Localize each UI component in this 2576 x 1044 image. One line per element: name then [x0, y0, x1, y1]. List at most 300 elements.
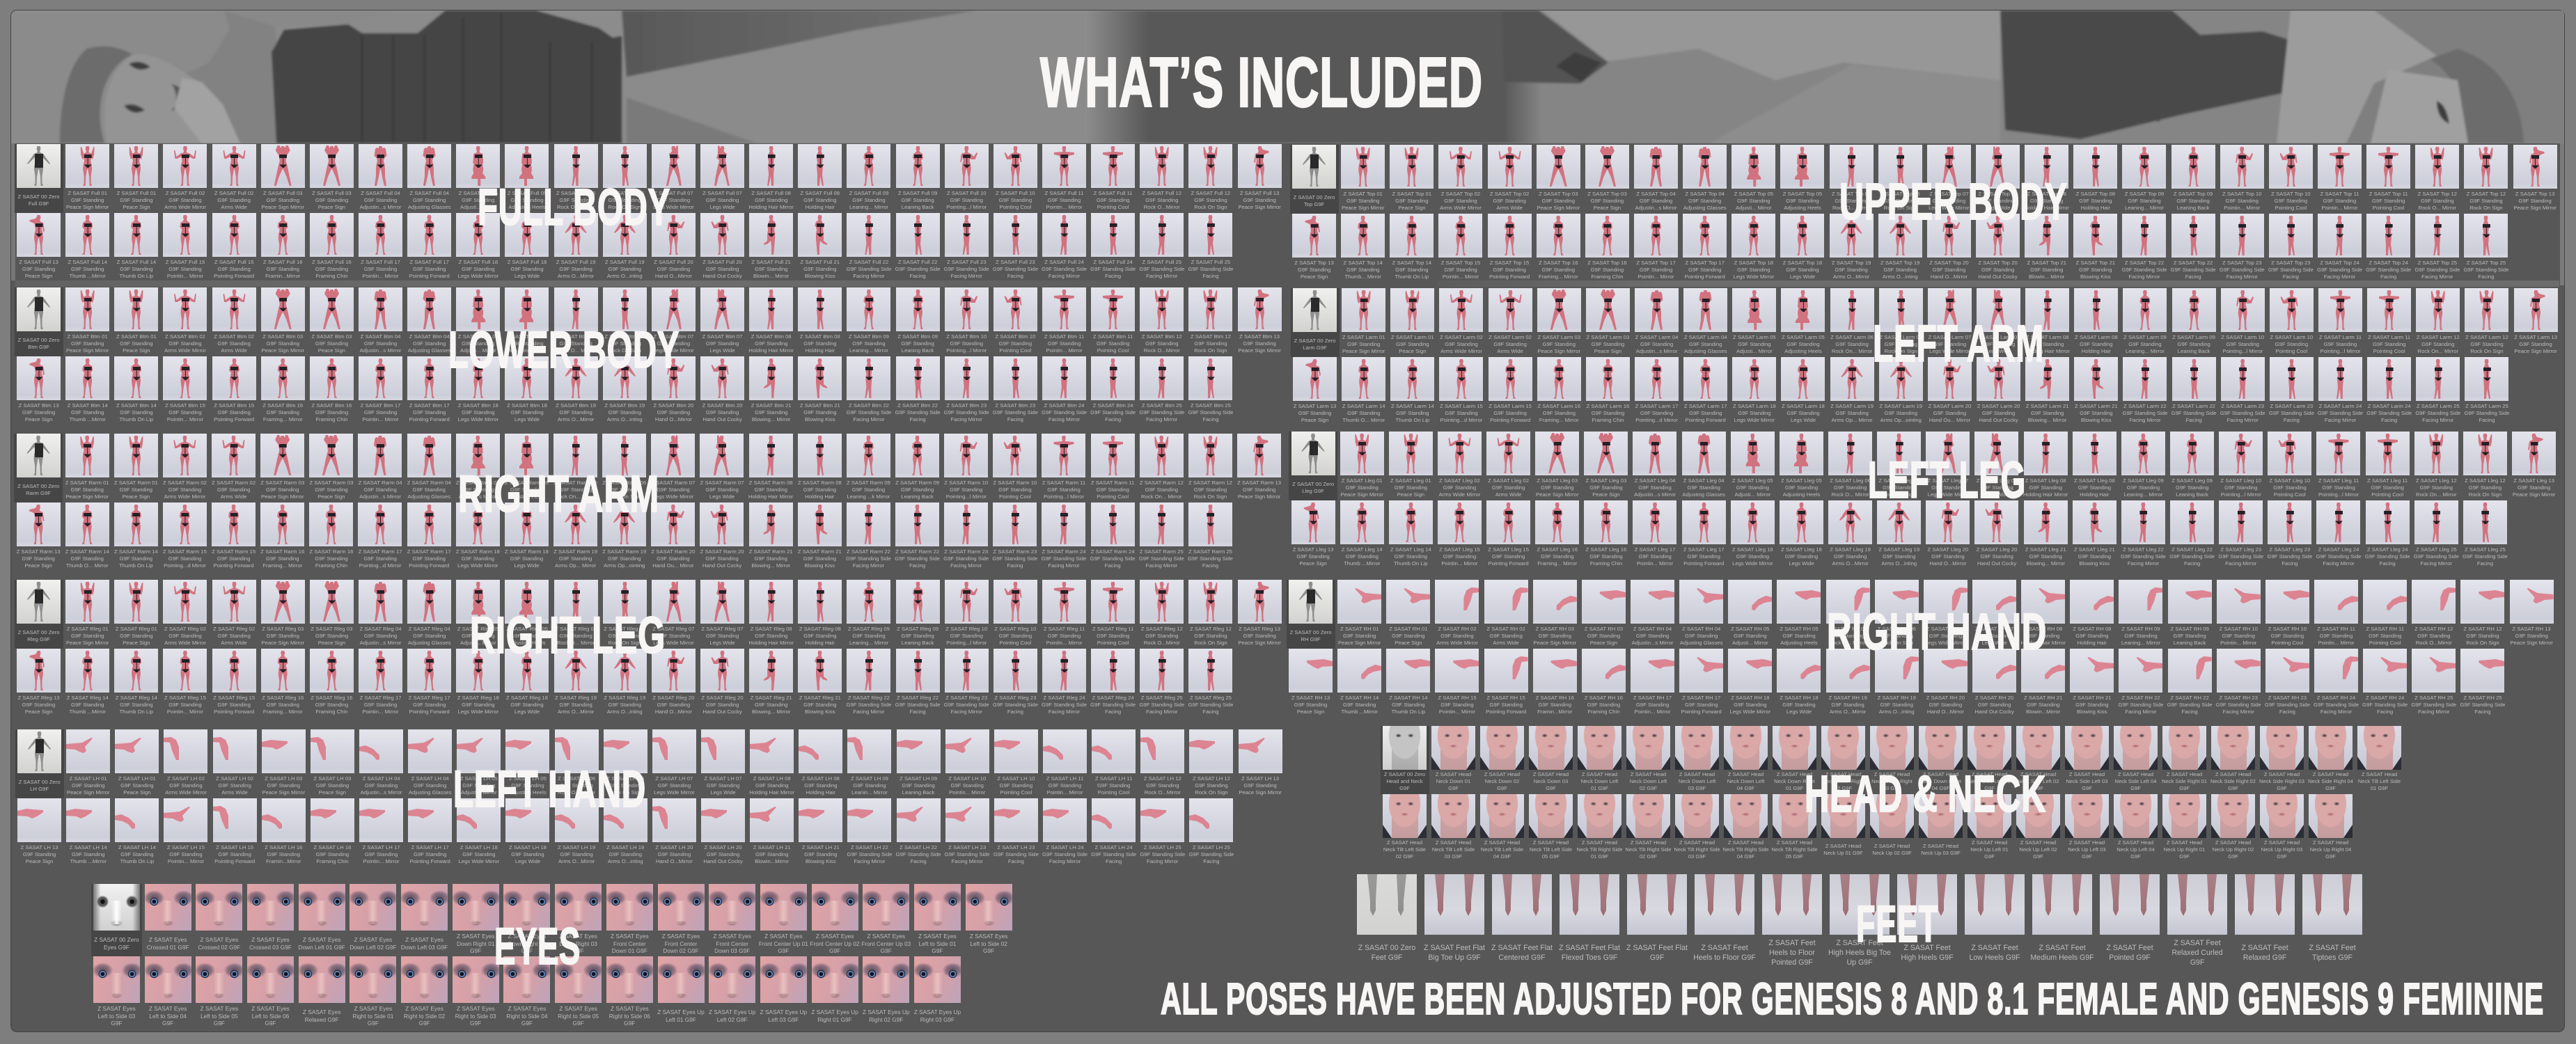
row 1: Adjustin...s Mirror	[1632, 640, 1673, 646]
row 2: Z SASAT Top 17	[1685, 259, 1725, 266]
row 2: G9F Standing	[1396, 410, 1429, 416]
row 1: G9F Standing	[1145, 340, 1179, 347]
row 2: G9F Standing	[217, 409, 251, 416]
row 1: Rock On... Mirror	[555, 493, 596, 500]
row 2: G9F Standing	[72, 851, 104, 857]
row 1: Down Right 01	[457, 940, 494, 947]
row 1: G9F Standing	[1443, 484, 1476, 491]
row 2: Peace Sign	[1301, 417, 1328, 423]
row 1: Rock O...Mirror	[1145, 789, 1181, 796]
row 2: Z SASAT LH 18	[509, 844, 547, 851]
row 2: Facing Mirror	[2128, 274, 2160, 280]
row 1: Rock On Sign	[1194, 640, 1227, 646]
row 2: Z SASAT Full 25	[1191, 259, 1230, 264]
row 1: Z SASAT Lleg 04	[1683, 477, 1725, 483]
row 2: Facing Mirror	[1049, 858, 1081, 864]
row 1: Z SASAT Feet	[2309, 944, 2356, 952]
row 1: Z SASAT RH 01	[1340, 625, 1379, 632]
row 2: Thumb ...Mirror	[69, 416, 106, 422]
background band right column	[1438, 280, 2559, 287]
row 1: Z SASAT Rleg 12	[1141, 625, 1183, 632]
row 1: G9F Standing	[218, 782, 251, 789]
row 1: G9F Standing	[804, 782, 838, 789]
row 2: Legs Wide Mirror	[457, 562, 498, 569]
row 1: Z SASAT 00 Zero	[94, 936, 139, 943]
row 1: Big Toe Up G9F	[1428, 954, 1481, 962]
row 2: Facing Mirror	[1049, 709, 1080, 715]
row 1: Crossed 02 G9F	[198, 944, 240, 951]
row 2: G9F Standing	[168, 266, 202, 272]
row 1: Z SASAT Lleg 02	[1439, 477, 1480, 483]
row 2: Z SASAT Rarm 17	[407, 548, 451, 554]
row 2: Z SASAT Head	[1484, 839, 1520, 846]
row 1: G9F Standing	[1048, 340, 1081, 347]
row 1: Peace Sign Mirror	[1238, 493, 1280, 500]
row 2: Z SASAT Rarm 23	[993, 548, 1037, 554]
row 1: G9F Standing	[267, 633, 299, 639]
row 1: Z SASAT Larm 12	[2465, 334, 2508, 340]
row 1: Pointin... Mirror	[1046, 204, 1083, 210]
row 2: Facing	[1106, 858, 1122, 864]
row 2: Legs Wide Mirror	[458, 273, 498, 279]
row 1: Front Center Up 03	[861, 940, 911, 947]
row 2: Pointing Forward	[409, 273, 450, 279]
row 1: Z SASAT Feet	[2106, 944, 2153, 952]
row 1: Arms Wide	[1497, 348, 1523, 354]
row 1: Down 01 G9F	[612, 947, 647, 954]
row 1: Rock O...Mirror	[1144, 347, 1180, 354]
row 2: G9F Standing	[754, 555, 787, 562]
row 2: Facing	[910, 273, 926, 279]
heading: eyes: EYES	[494, 917, 581, 975]
row 1: G9F Standing	[2176, 198, 2210, 204]
row 2: G9F Standing	[559, 409, 592, 416]
row 1: Holding Hair	[2082, 348, 2111, 354]
row 1: Peace Sign	[318, 204, 345, 210]
row 1: Z SASAT Eyes	[354, 936, 392, 943]
row 2: G9F Standing	[657, 555, 690, 562]
row 1: G9F Standing	[1097, 197, 1129, 203]
row 1: Arms Wide Mirror	[164, 640, 206, 646]
row 2: G9F Standing	[1835, 267, 1868, 273]
row 2: Z SASAT Rarm 18	[456, 548, 500, 554]
row 2: Left 03 G9F	[768, 1016, 799, 1023]
row 2: G9F Standing	[23, 851, 56, 857]
row 1: G9F Standing	[657, 197, 690, 203]
row 1: Z SASAT Full 03	[312, 189, 352, 196]
row 1: Holding Hair	[806, 789, 835, 796]
row 1: Z SASAT Rarm 11	[1042, 479, 1085, 486]
row 2: Arms Op... Mirror	[555, 562, 596, 569]
row 1: G9F Standing	[2518, 484, 2550, 491]
row 2: Z SASAT Btm 20	[702, 402, 742, 408]
row 2: G9F Standing Side	[2122, 410, 2167, 416]
row 1: 01 G9F	[1591, 785, 1608, 791]
row 2: Pointing Forward	[409, 709, 450, 715]
row 2: Z SASAT RH 25	[2463, 695, 2502, 700]
row 2: Z SASAT Top 23	[2271, 259, 2311, 266]
row 2: G9F Standing Side	[1139, 702, 1184, 708]
row 2: Z SASAT Rleg 20	[652, 695, 694, 700]
row 2: Peace Sign	[25, 709, 52, 715]
row 2: G9F Standing	[1782, 702, 1816, 708]
row 1: Adjusti... Mirror	[1736, 348, 1773, 354]
row 2: G9F Standing	[2075, 702, 2109, 708]
row 1: G9F	[2179, 785, 2190, 791]
row 1: Z SASAT Btm 08	[800, 333, 840, 340]
row 1: Adjustin...s Mirror	[360, 204, 401, 210]
row 1: G9F Standing	[1395, 198, 1429, 204]
row 1: G9F Standing	[1884, 198, 1917, 204]
row 1: Rarm G9F	[26, 490, 51, 496]
row 1: Z SASAT Top 03	[1587, 191, 1627, 196]
row 2: Z SASAT Lleg 14	[1390, 546, 1431, 553]
row 1: Peace Sign	[1397, 491, 1424, 498]
row 1: Z SASAT Larm 01	[1342, 334, 1385, 340]
row 2: G9F Standing	[217, 555, 250, 562]
background bands between screenshot blocks	[15, 280, 1129, 287]
row 1: Adjusting Heels	[509, 789, 547, 796]
row 1: Z SASAT Feet	[1903, 944, 1951, 952]
row 2: Pointin... Mirror	[1439, 709, 1475, 715]
row 1: Rock On Sign	[1195, 789, 1228, 796]
row 1: G9F Standing	[2470, 341, 2504, 347]
row 1: Neck Side Right 01	[2162, 778, 2207, 784]
row 2: G9F Standing	[2030, 267, 2063, 273]
row 2: G9F Standing	[1883, 553, 1915, 560]
row 1: Rock On Sign	[2469, 491, 2502, 498]
row 2: Z SASAT Btm 25	[1191, 402, 1231, 408]
row 1: G9F Standing	[1243, 340, 1276, 347]
row 1: Pointing...l Mirror	[2222, 348, 2263, 354]
row 2: G9F Standing	[71, 409, 104, 416]
row 2: Neck Tilt Left Side	[1530, 846, 1572, 853]
row 2: G9F Standing	[803, 702, 837, 708]
row 2: Peace Sign	[25, 416, 52, 422]
row 2: Blowing Kiss	[2081, 417, 2112, 423]
row 2: Z SASAT Head	[2020, 839, 2056, 846]
row 1: Holding Hair	[806, 640, 835, 646]
row 2: Pointing...d Mirror	[359, 562, 401, 569]
row 1: Z SASAT Larm 09	[2172, 334, 2215, 340]
row 2: Blowin... Mirror	[753, 273, 789, 279]
row 1: 04 G9F	[1737, 785, 1754, 791]
row 2: Z SASAT LH 22	[851, 844, 888, 851]
row 1: 02 G9F	[1640, 785, 1657, 791]
row 2: Neck Up Right 03	[2261, 846, 2302, 853]
row 1: G9F Standing	[608, 633, 641, 639]
row 1: Legs Wide Mirror	[653, 640, 694, 646]
row 1: Pointing Cool	[1097, 493, 1129, 500]
row 1: G9F Standing	[1194, 633, 1227, 639]
row 2: Z SASAT Rarm 16	[260, 548, 304, 554]
row 2: Z SASAT Top 16	[1587, 259, 1627, 266]
row 1: Peace Sign Mirror	[2514, 348, 2557, 354]
row 1: G9F Standing	[608, 487, 641, 493]
row 2: G9F Standing	[1638, 553, 1672, 560]
row 2: Z SASAT Head	[1825, 843, 1861, 849]
row 2: Z SASAT LH 21	[802, 844, 840, 851]
row 1: Pointing Cool	[2274, 491, 2306, 498]
row 2: Z SASAT Top 21	[2027, 259, 2066, 266]
row 2: Z SASAT LH 23	[997, 844, 1035, 851]
row 2: G9F Standing	[1347, 410, 1380, 416]
row 1: Z SASAT Head	[1972, 771, 2007, 777]
row 2: Facing Mirror	[2324, 274, 2355, 280]
row 1: G9F Standing	[217, 197, 251, 203]
row 1	[1291, 288, 2558, 357]
row 2: G9F	[214, 1020, 225, 1027]
row 2: Z SASAT LH 25	[1193, 844, 1230, 851]
row 1: Z SASAT Rleg 10	[994, 625, 1036, 632]
row 1: G9F Standing	[168, 197, 202, 203]
row 1: Z SASAT Rleg 07	[702, 625, 744, 632]
row 2: G9F Standing Side	[846, 702, 891, 708]
row 2: Facing Mirror	[853, 416, 885, 422]
row 2: Z SASAT RH 19	[1878, 695, 1916, 700]
row 1: Rock O... Mirror	[557, 204, 595, 210]
row 1: Arms Wide Mirror	[164, 347, 206, 354]
row 2: Z SASAT Rarm 15	[212, 548, 256, 554]
row 1: G9F Standing	[1395, 484, 1427, 491]
row 2: Framing Chin	[1592, 417, 1624, 423]
row 2: Framin...Mirror	[265, 273, 300, 279]
row 1: Z SASAT Full 06	[556, 189, 595, 196]
row 1: G9F	[778, 947, 789, 954]
row 1: Neck Down Right	[1920, 778, 1961, 784]
row 1: Rock On Sign	[608, 493, 641, 500]
row 2: G9F Standing	[1736, 553, 1769, 560]
row 2: Facing	[2380, 274, 2396, 280]
row 2: Z SASAT Top 18	[1734, 259, 1773, 266]
row 1: G9F Standing	[658, 782, 691, 789]
row 1: Centered G9F	[1498, 954, 1546, 962]
row 1: Peace Sign Mirror	[2513, 491, 2555, 498]
row 2: G9F Standing	[1688, 267, 1721, 273]
row 2: Left 02 G9F	[717, 1016, 748, 1023]
row 1: Crossed 03 G9F	[249, 944, 292, 951]
row 2: G9F Standing Side	[2121, 553, 2166, 560]
row 2: Thumb ...Mirror	[69, 709, 106, 715]
row 1: Z SASAT Rleg 02	[164, 625, 206, 632]
row 2: Z SASAT Lleg 24	[2318, 546, 2359, 553]
row 1: Z SASAT 00 Zero	[1294, 337, 1336, 344]
row 2: Hand Out Cocky	[1974, 709, 2014, 715]
row 2: Z SASAT Btm 25	[1142, 402, 1182, 408]
row 1: Peace Sign Mirror	[1537, 205, 1580, 211]
row 2: Z SASAT Full 24	[1093, 259, 1133, 264]
row 1: G9F Standing	[267, 782, 300, 789]
row 2: G9F Standing	[1492, 553, 1525, 560]
row 2: G9F Standing Side	[2316, 553, 2362, 560]
row 1: Z SASAT RH 07	[1975, 625, 2013, 632]
row 2: Z SASAT LH 23	[948, 844, 986, 851]
row 2: Arms O...inting	[1883, 274, 1918, 280]
row 2: Framing Chin	[315, 709, 347, 715]
row 1: Z SASAT Eyes	[559, 933, 597, 940]
row 2: Z SASAT Top 15	[1490, 259, 1529, 266]
row 2: G9F Standing Side	[2220, 267, 2265, 273]
row 1: Peace Sign Mirror	[1342, 348, 1385, 354]
row 1: Z SASAT Head	[2020, 771, 2056, 777]
row 1: Z SASAT Eyes	[457, 933, 495, 940]
row 2: Framing Chin	[315, 273, 347, 279]
row 2: Facing Mirror	[2421, 560, 2452, 567]
row 2: Pointing Forward	[214, 709, 254, 715]
row 1: Z SASAT RH 06	[1828, 625, 1867, 632]
row 2: G9F Standing	[2080, 410, 2113, 416]
row 2: Z SASAT Top 17	[1636, 259, 1676, 266]
row 2: G9F Standing	[510, 555, 543, 562]
row 1: G9F Standing	[902, 782, 935, 789]
row 1: Z SASAT Rarm 10	[944, 479, 988, 486]
row 1: Arms Wide	[1493, 640, 1519, 646]
row 2: Legs Wide	[514, 562, 540, 569]
row 1: G9F Standing	[217, 487, 250, 493]
row 1: G9F Standing	[2128, 341, 2162, 347]
row 2	[1383, 794, 2353, 860]
row 2: Z SASAT Rarm 25	[1140, 548, 1184, 554]
row 2: Facing	[2477, 560, 2493, 567]
row 2: 03 G9F	[1688, 853, 1706, 860]
row 2: Blowing Kiss	[805, 562, 835, 569]
row 1: Rock On Sign	[608, 640, 641, 646]
row 1: Rock On Sign	[608, 204, 641, 210]
row 1: Rock On Sign	[1883, 491, 1915, 498]
row 2: Z SASAT Larm 18	[1782, 402, 1825, 409]
row 2: Thumb On Lip	[119, 562, 153, 569]
row 1: G9F Standing	[950, 197, 983, 203]
row 1: G9F Standing	[364, 633, 397, 639]
row 2: Facing Mirror	[2225, 560, 2256, 567]
row 2: Facing	[1202, 416, 1218, 422]
heading: right leg: RIGHT LEG	[470, 606, 666, 664]
row 1: G9F Standing	[901, 633, 934, 639]
row 1: Neck Down 02	[1485, 778, 1519, 784]
row 2: Blowing... Mirror	[752, 416, 790, 422]
row 1: G9F Standing	[706, 340, 739, 347]
row 2: Z SASAT Rarm 14	[65, 548, 109, 554]
row 2: Framing Chin	[315, 416, 347, 422]
row 1: G9F Standing	[803, 487, 836, 493]
row 2: Hand Out Cocky	[702, 416, 742, 422]
row 2: Arms O...Mirror	[558, 416, 594, 422]
row 1: Peace Sign	[319, 789, 346, 796]
row 2: G9F Standing Side	[846, 409, 891, 416]
row 1: G9F Standing	[901, 340, 934, 347]
row 2: G9F Standing Side	[943, 555, 989, 562]
row 2: Facing	[1008, 858, 1024, 864]
row 2: G9F	[2033, 853, 2043, 860]
row 1: Z SASAT Rleg 07	[652, 625, 694, 632]
row 1: Z SASAT 00 Zero	[17, 483, 59, 489]
row 1: Pointin... Mirror	[2224, 205, 2260, 211]
row 1: G9F	[829, 947, 840, 954]
row 1: Peace Sign	[1590, 640, 1617, 646]
panel: right arm poses	[14, 434, 1281, 569]
row 2: G9F	[162, 1020, 173, 1027]
row 2: G9F Standing Side	[994, 851, 1039, 857]
row 2: Z SASAT RH 16	[1585, 695, 1623, 700]
row 1: G9F Standing	[803, 633, 837, 639]
row 1: G9F	[2277, 785, 2287, 791]
row 2: Z SASAT Btm 24	[1093, 402, 1133, 408]
row 1	[1357, 874, 2362, 967]
row 1: Pointing...l Mirror	[946, 493, 987, 500]
row 2: G9F Standing Side	[2366, 267, 2411, 273]
row 2: Z SASAT Full 19	[556, 259, 595, 264]
row 2: Z SASAT Btm 20	[653, 402, 693, 408]
row 1: Z SASAT Larm 10	[2270, 334, 2313, 340]
row 1: Legs Wide	[1985, 205, 2011, 211]
row 1: G9F Standing	[1345, 484, 1379, 491]
row 1: Z SASAT Feet Flat	[1626, 944, 1688, 952]
row 1: Z SASAT Head	[2362, 771, 2397, 777]
row 1: Z SASAT Lleg 07	[1977, 477, 2017, 483]
row 2: Z SASAT Btm 22	[897, 402, 938, 408]
row 2: Z SASAT Eyes	[405, 1005, 443, 1012]
row 2: Blowing... Mirror	[2026, 560, 2065, 567]
row 1: Adjusting Heels	[508, 204, 546, 210]
row 1: Z SASAT Head	[1484, 771, 1520, 777]
row 1: Adjusting Glasses	[407, 493, 450, 500]
row 2: G9F Standing	[1980, 553, 2013, 560]
row 1: Legs Wide	[710, 789, 736, 796]
row 1: Pointing...l Mirror	[946, 640, 987, 646]
row 1: G9F Standing	[950, 633, 983, 639]
row 1: Holding Hair Mirror	[748, 347, 794, 354]
row 1: Rock On... Mirror	[2418, 348, 2458, 354]
row 2: G9F Standing Side	[1090, 702, 1136, 708]
row 2: Framing Chin	[1590, 560, 1622, 567]
row 1: Z SASAT Top 07	[1929, 191, 1969, 196]
row 1: Arms Wide	[1495, 491, 1521, 498]
row 1: Z SASAT Rarm 11	[1091, 479, 1134, 486]
row 2: Blowing Kiss	[2077, 709, 2107, 715]
row 2: G9F Standing Side	[2169, 553, 2215, 560]
row 1: G9F Standing	[1243, 487, 1275, 493]
row 1: Peace Sign Mirror	[1239, 789, 1282, 796]
row 1: Adjusting Glasses	[409, 789, 451, 796]
row 1: Z SASAT Larm 09	[2123, 334, 2167, 340]
row 2: Blowin...Mirror	[2026, 709, 2060, 715]
row 2: Z SASAT Rarm 17	[359, 548, 402, 554]
row 1: G9F Standing	[510, 487, 543, 493]
row 2: Pointin... Mirror	[167, 416, 203, 422]
row 1: G9F Standing	[1048, 633, 1081, 639]
row 1: G9F Standing	[1049, 782, 1081, 789]
row 2: Facing Mirror	[853, 273, 885, 279]
row 1: Legs Wide Mirror	[1925, 640, 1966, 646]
row 1: G9F Standing	[2176, 484, 2208, 491]
row 1: Down 03 G9F	[714, 947, 750, 954]
row 2: G9F Standing	[755, 409, 787, 416]
row 1: Flexed Toes G9F	[1562, 954, 1617, 962]
row 1: G9F	[932, 947, 943, 954]
row 2: G9F Standing	[71, 702, 104, 708]
row 1: Z SASAT Larm 05	[1733, 334, 1776, 340]
row 1: G9F Standing	[901, 487, 934, 493]
row 1: Pointin... Mirror	[949, 789, 985, 796]
row 1: G9F Standing	[1000, 782, 1032, 789]
row 1: Z SASAT Rarm 04	[359, 479, 402, 486]
row 1: G9F Standing	[657, 340, 690, 347]
row 1	[15, 729, 1282, 798]
row 1: Z SASAT LH 09	[900, 775, 937, 781]
row 1: Z SASAT Lleg 11	[2318, 477, 2359, 483]
row 1: Z SASAT Top 04	[1636, 191, 1676, 196]
row 2: Thumb O... Mirror	[66, 562, 109, 569]
